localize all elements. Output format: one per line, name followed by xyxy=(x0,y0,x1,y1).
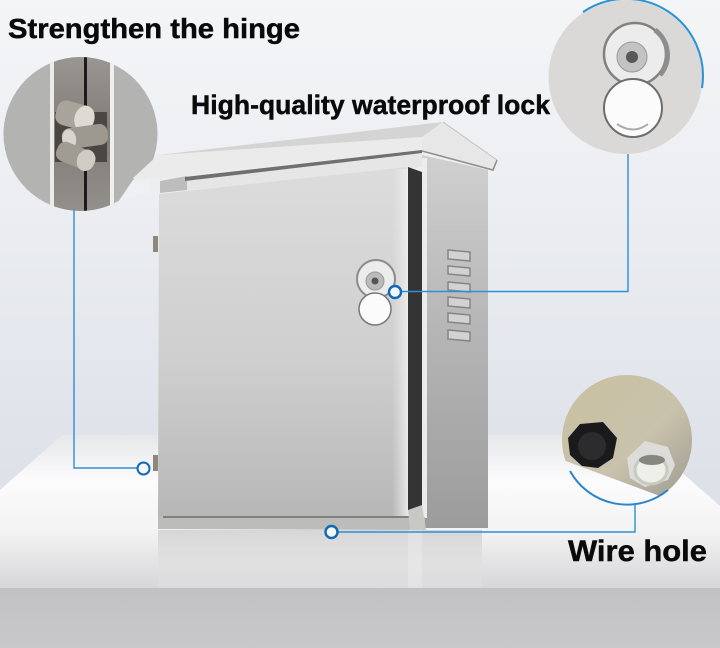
wire hole leader line xyxy=(338,504,635,532)
bottom edge xyxy=(158,517,425,530)
box reflection xyxy=(158,530,482,588)
enclosure body xyxy=(153,152,488,530)
lock circle photo xyxy=(548,0,702,154)
hinge dot xyxy=(138,462,150,474)
door lock xyxy=(357,260,395,298)
label: waterproof lock: High-quality waterproof lock xyxy=(191,90,550,120)
door xyxy=(158,167,408,517)
left hinges xyxy=(153,236,158,252)
enclosure roof xyxy=(118,122,497,202)
callout: wire hole detail xyxy=(326,370,700,538)
door gap xyxy=(408,167,422,515)
table xyxy=(0,435,720,648)
label: strengthen the hinge: Strengthen the hinge xyxy=(8,13,300,44)
hinge leader line xyxy=(74,210,138,468)
lock leader line xyxy=(401,154,628,292)
wire hole circle photo xyxy=(562,375,692,496)
wire hole dot xyxy=(326,526,338,538)
hinge circle photo xyxy=(4,57,158,211)
cabinet top band xyxy=(160,152,422,193)
callout: hinge detail xyxy=(0,50,160,474)
label: wire hole: Wire hole xyxy=(568,535,707,568)
lock dot xyxy=(389,286,401,298)
side vents xyxy=(448,250,470,341)
side panel xyxy=(422,155,488,528)
callout: lock detail xyxy=(389,0,703,298)
